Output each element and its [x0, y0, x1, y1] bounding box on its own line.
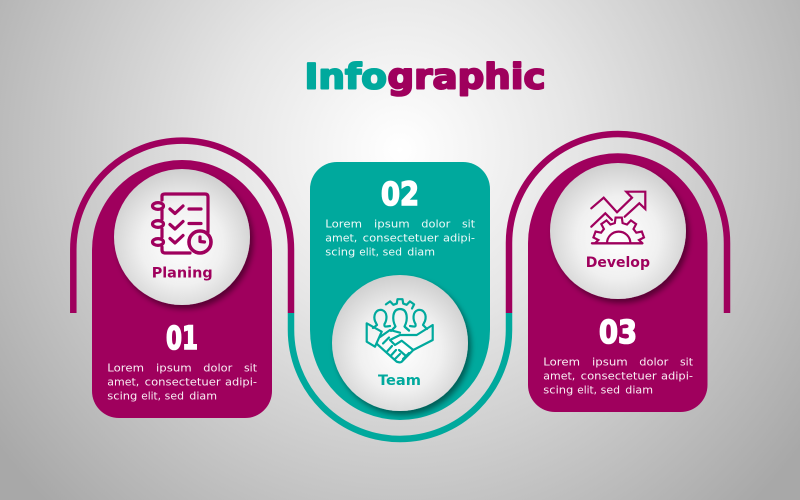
- text: planing description: ipsum: [156, 362, 192, 374]
- text: planing description: elit,: [141, 390, 161, 402]
- text: develop description: ipsum: [592, 356, 628, 368]
- text: develop description: sit: [680, 356, 693, 368]
- number: 03: 03: [599, 313, 637, 351]
- text: team description: amet,: [325, 232, 357, 244]
- text: planing description: amet,: [107, 376, 139, 388]
- label: team: Team: [378, 373, 421, 389]
- number: 01: 01: [166, 319, 198, 357]
- text: develop description: scing: [543, 384, 573, 396]
- text: develop description: elit,: [577, 384, 597, 396]
- circle: planing: [114, 169, 250, 305]
- text: team description: sit: [462, 218, 475, 230]
- text: team description: scing: [325, 246, 355, 258]
- text: planing description: scing: [107, 390, 137, 402]
- text: team description: Lorem: [325, 218, 362, 230]
- text: develop description: sed: [601, 384, 620, 396]
- title: graphic: [388, 58, 546, 98]
- text: develop description: dolor: [639, 356, 669, 368]
- arc: team outer ring: [291, 313, 509, 439]
- icon: checklist notebook with clock: [152, 194, 211, 253]
- panel: step 03 develop: [509, 134, 727, 412]
- text: team description: diam: [407, 246, 435, 258]
- text: planing description: sit: [244, 362, 257, 374]
- text: develop description: amet,: [543, 370, 575, 382]
- circle: team: [332, 275, 468, 411]
- text: planing description: diam: [189, 390, 217, 402]
- text: team description: dolor: [421, 218, 451, 230]
- text: planing description: consectetuer: [145, 376, 221, 388]
- text: planing description: Lorem: [107, 362, 144, 374]
- label: planing: Planing: [152, 266, 213, 282]
- text: develop description: Lorem: [543, 356, 580, 368]
- arc: planing outer ring: [73, 141, 291, 313]
- text: develop description: consectetuer: [581, 370, 657, 382]
- title: [304, 58, 546, 98]
- text: team description: sed: [383, 246, 402, 258]
- number: 02: 02: [381, 175, 419, 213]
- text: planing description: sed: [165, 390, 184, 402]
- text: team description: adipi-: [443, 232, 475, 244]
- icon: team handshake with gear: [367, 299, 433, 362]
- panel: step 01 planing: [73, 141, 291, 418]
- label: develop: Develop: [586, 255, 650, 271]
- text: team description: elit,: [359, 246, 379, 258]
- text: develop description: adipi-: [661, 370, 693, 382]
- text: planing description: adipi-: [225, 376, 257, 388]
- card: planing: [92, 160, 272, 418]
- arc: develop outer ring: [509, 134, 727, 313]
- card: team: [310, 162, 490, 420]
- title: Info: [304, 58, 387, 98]
- text: planing description: dolor: [203, 362, 233, 374]
- text: team description: consectetuer: [363, 232, 439, 244]
- card: develop: [528, 153, 708, 412]
- text: team description: ipsum: [374, 218, 410, 230]
- text: develop description: diam: [625, 384, 653, 396]
- icon: growth arrow and gear: [591, 192, 645, 243]
- panel: step 02 team: [291, 162, 509, 439]
- circle: develop: [550, 163, 686, 299]
